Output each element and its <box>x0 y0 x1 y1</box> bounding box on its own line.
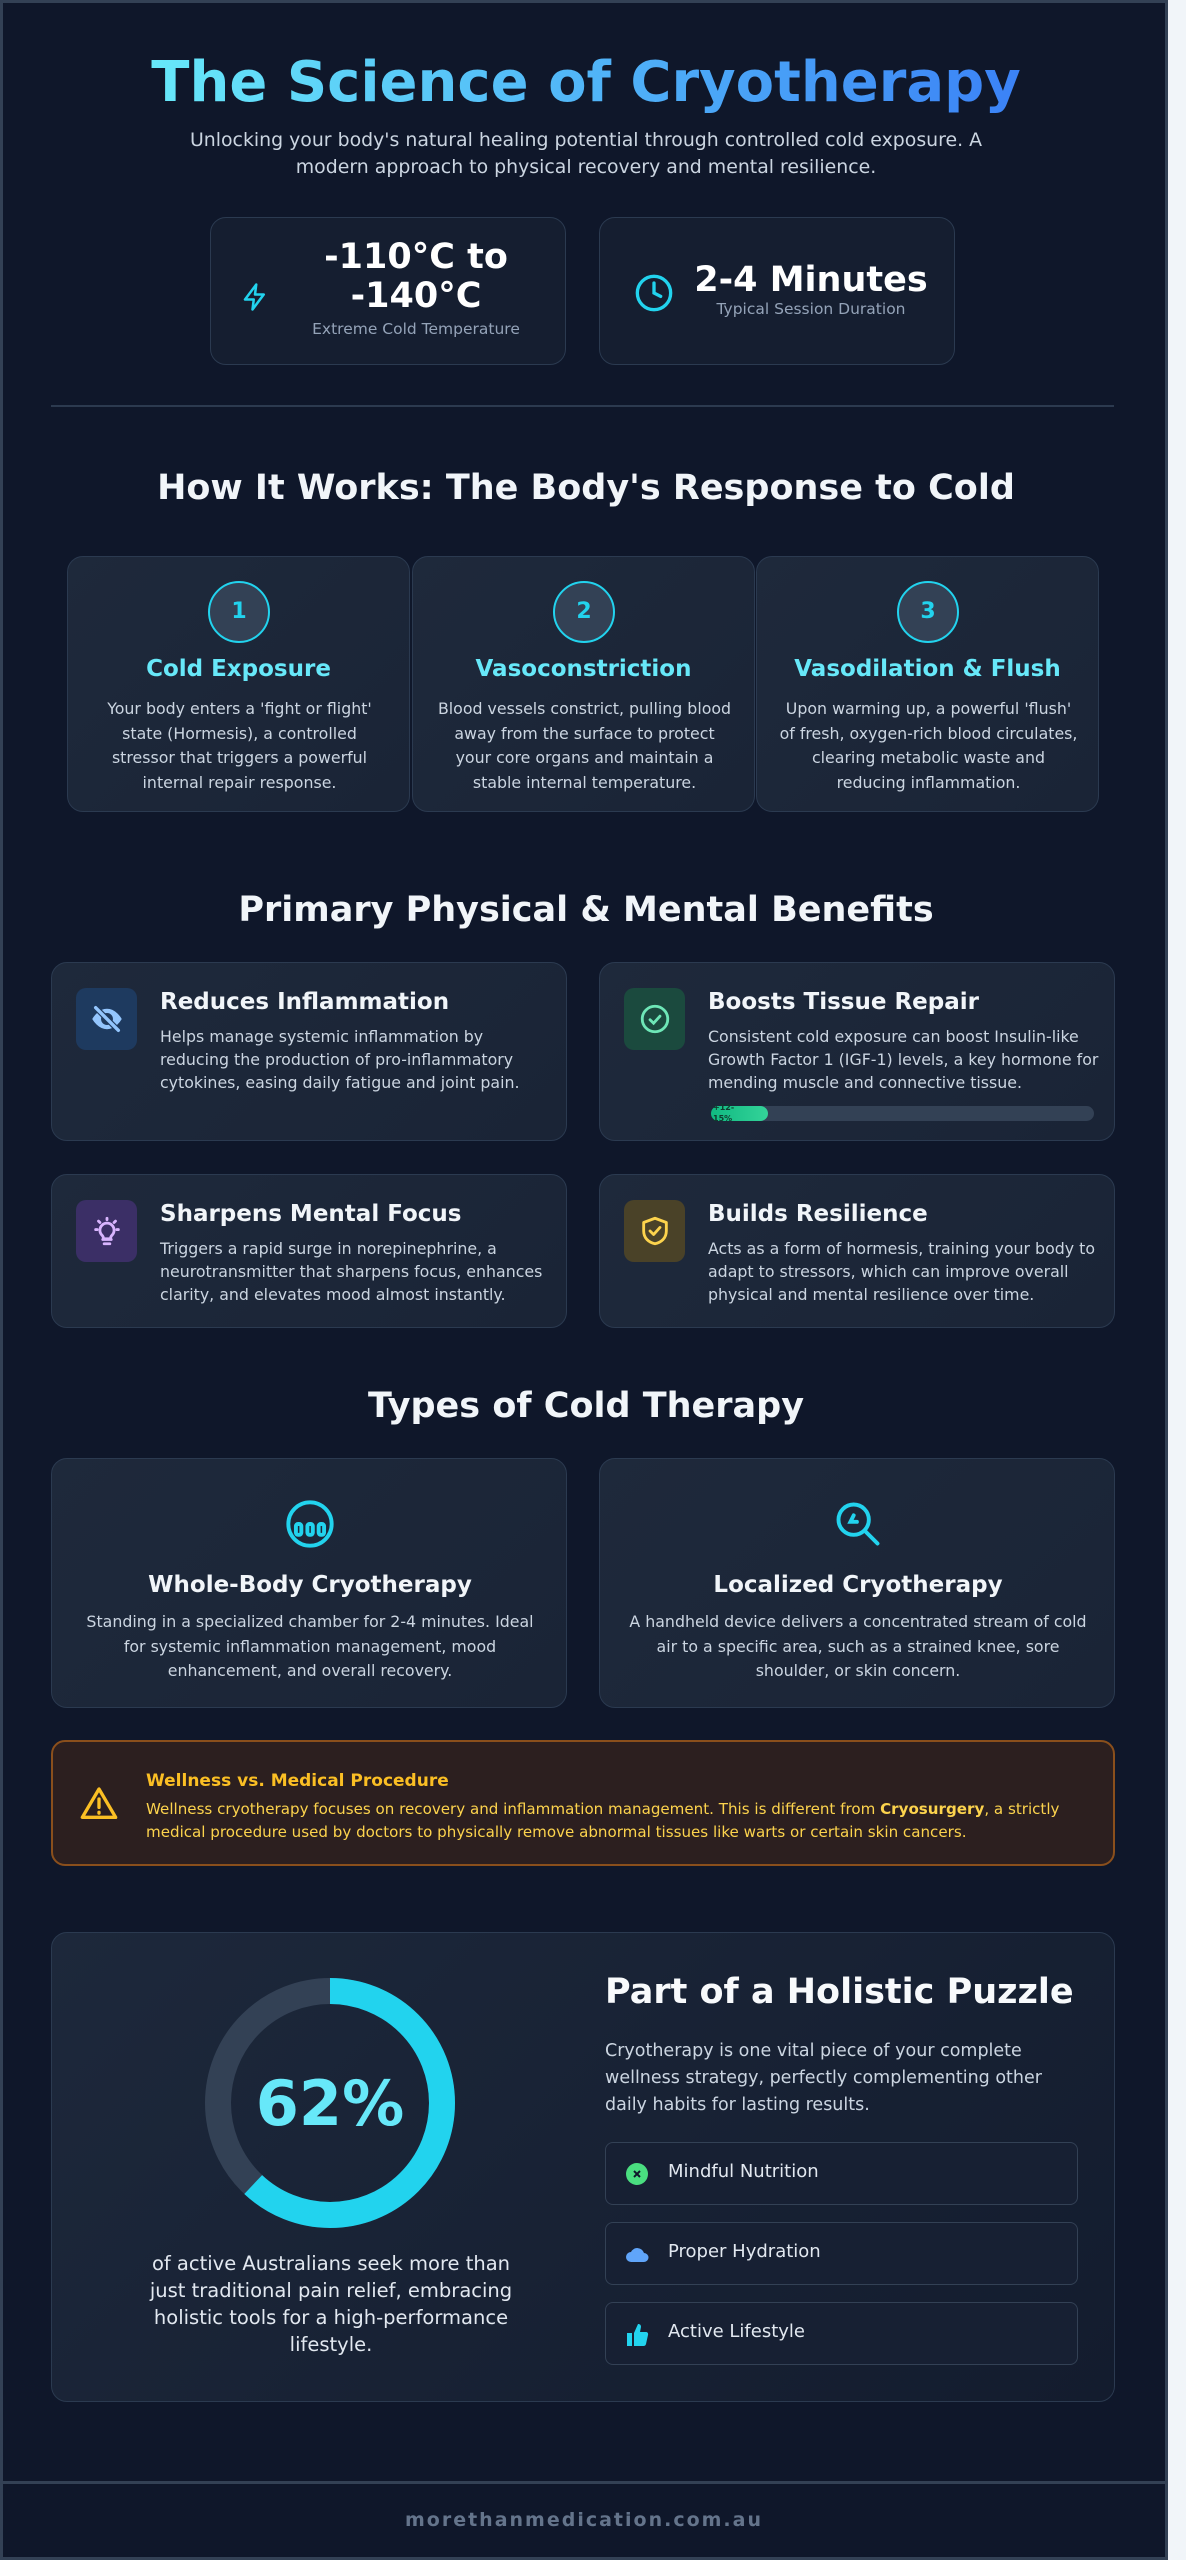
text: Standing in a specialized chamber for 2-4 minutes. Ideal for systemic inflammation management, mood enhancement, and overall recovery. <box>86 1612 534 1680</box>
callout text: Wellness cryotherapy focuses on recovery and inflammation management. This is different from Cryosurgery, a strictly medical procedure used by doctors to physically remove abnormal tissues like warts or certain skin cancers. <box>146 1800 1059 1841</box>
step text: reducing inflammation. <box>837 772 1020 792</box>
icon: lightbulb <box>76 1200 137 1262</box>
text: Helps manage systemic inflammation by reducing the production of pro-inflammatory cytokines, easing daily fatigue and joint pain. <box>160 1027 520 1092</box>
title: Builds Resilience <box>708 1201 928 1227</box>
icon: check circle <box>624 988 685 1050</box>
step title: Vasodilation & Flush <box>794 656 1061 682</box>
panel: holistic <box>51 1932 1115 2402</box>
item: hydration <box>605 2222 1078 2285</box>
title: Boosts Tissue Repair <box>708 989 979 1015</box>
type: whole body <box>51 1458 567 1708</box>
footer text: morethanmedication.com.au <box>405 2509 763 2531</box>
heading: how it works: How It Works: The Body's Response to Cold <box>157 468 1015 508</box>
title: Localized Cryotherapy <box>713 1572 1003 1598</box>
heading: Part of a Holistic Puzzle <box>605 1972 1074 2012</box>
benefit: focus <box>51 1174 567 1328</box>
stat text: -140°C <box>351 276 481 316</box>
icon: warning <box>80 1787 118 1819</box>
number circle <box>897 581 959 643</box>
text: Acts as a form of hormesis, training your body to adapt to stressors, which can improve overall physical and mental resilience over time. <box>708 1239 1095 1304</box>
title: Whole-Body Cryotherapy <box>148 1572 472 1598</box>
heading: benefits: Primary Physical & Mental Benefits <box>238 890 934 930</box>
donut chart 62% <box>205 1978 455 2228</box>
type: localized <box>599 1458 1115 1708</box>
heading: types: Types of Cold Therapy <box>368 1386 804 1426</box>
step text <box>780 699 1077 792</box>
title: Sharpens Mental Focus <box>160 1201 461 1227</box>
progress bar: 15% <box>713 1114 732 1123</box>
callout title: Wellness vs. Medical Procedure <box>146 1771 449 1791</box>
step text: Your body enters a 'fight or flight' state (Hormesis), a controlled stressor that triggers a powerful internal repair response. <box>107 699 372 792</box>
stat text: Typical Session Duration <box>716 300 906 318</box>
stat text: -110°C to <box>324 237 508 277</box>
step text: Blood vessels constrict, pulling blood away from the surface to protect your core organs and maintain a stable internal temperature. <box>438 699 731 792</box>
text: Triggers a rapid surge in norepinephrine, a neurotransmitter that sharpens focus, enhances clarity, and elevates mood almost instantly. <box>160 1239 542 1304</box>
number circle: 1 <box>231 599 247 624</box>
step title: Cold Exposure <box>146 656 331 682</box>
title: Reduces Inflammation <box>160 989 449 1015</box>
item: nutrition: Mindful Nutrition <box>668 2161 819 2182</box>
paragraph: Cryotherapy is one vital piece of your complete wellness strategy, perfectly complementing other daily habits for lasting results. <box>605 2041 1042 2115</box>
stat text: 2-4 Minutes <box>694 260 928 300</box>
number circle <box>208 581 270 643</box>
step text: of fresh, oxygen-rich blood circulates, <box>780 724 1077 742</box>
stat card: duration <box>599 217 955 365</box>
text: Consistent cold exposure can boost Insulin-like Growth Factor 1 (IGF-1) levels, a key hormone for mending muscle and connective tissue. <box>708 1027 1098 1092</box>
item: nutrition <box>605 2142 1078 2205</box>
icon: eye-off <box>76 988 137 1050</box>
stat card: temperature <box>210 217 566 365</box>
item: active <box>605 2302 1078 2365</box>
number circle: 3 <box>920 599 936 624</box>
number circle: 2 <box>576 599 592 624</box>
stat text: Extreme Cold Temperature <box>312 320 520 338</box>
donut chart 62%: 62% <box>256 2067 404 2140</box>
icon: clock <box>636 274 672 312</box>
subtitle: Unlocking your body's natural healing potential through controlled cold exposure. A modern approach to physical recovery and mental resilience. <box>190 129 982 178</box>
text: A handheld device delivers a concentrated stream of cold air to a specific area, such as a strained knee, sore shoulder, or skin concern. <box>629 1612 1087 1680</box>
step text: Upon warming up, a powerful 'flush' <box>786 699 1071 718</box>
icon <box>836 1502 880 1546</box>
benefit: tissue repair <box>599 962 1115 1141</box>
benefit: resilience <box>599 1174 1115 1328</box>
callout: wellness vs medical <box>51 1740 1115 1866</box>
step text: clearing metabolic waste and <box>812 748 1045 767</box>
stat text <box>694 260 928 318</box>
step 2 <box>412 556 755 812</box>
item: active: Active Lifestyle <box>668 2321 805 2342</box>
donut caption: of active Australians seek more than just traditional pain relief, embracing holistic tools for a high-performance lifestyle. <box>150 2252 512 2356</box>
number circle <box>553 581 615 643</box>
step 3 <box>756 556 1099 812</box>
step title: Vasoconstriction <box>476 656 691 682</box>
item: hydration: Proper Hydration <box>668 2241 821 2262</box>
icon: shield <box>624 1200 685 1262</box>
progress bar: +12- <box>713 1103 734 1112</box>
icon: lightning <box>244 283 265 311</box>
stat text <box>312 237 520 338</box>
step 1 <box>67 556 410 812</box>
icon <box>286 1500 334 1548</box>
progress bar <box>711 1106 1094 1121</box>
footer <box>3 2481 1165 2560</box>
benefit: inflammation <box>51 962 567 1141</box>
title: The Science of Cryotherapy <box>151 50 1021 115</box>
